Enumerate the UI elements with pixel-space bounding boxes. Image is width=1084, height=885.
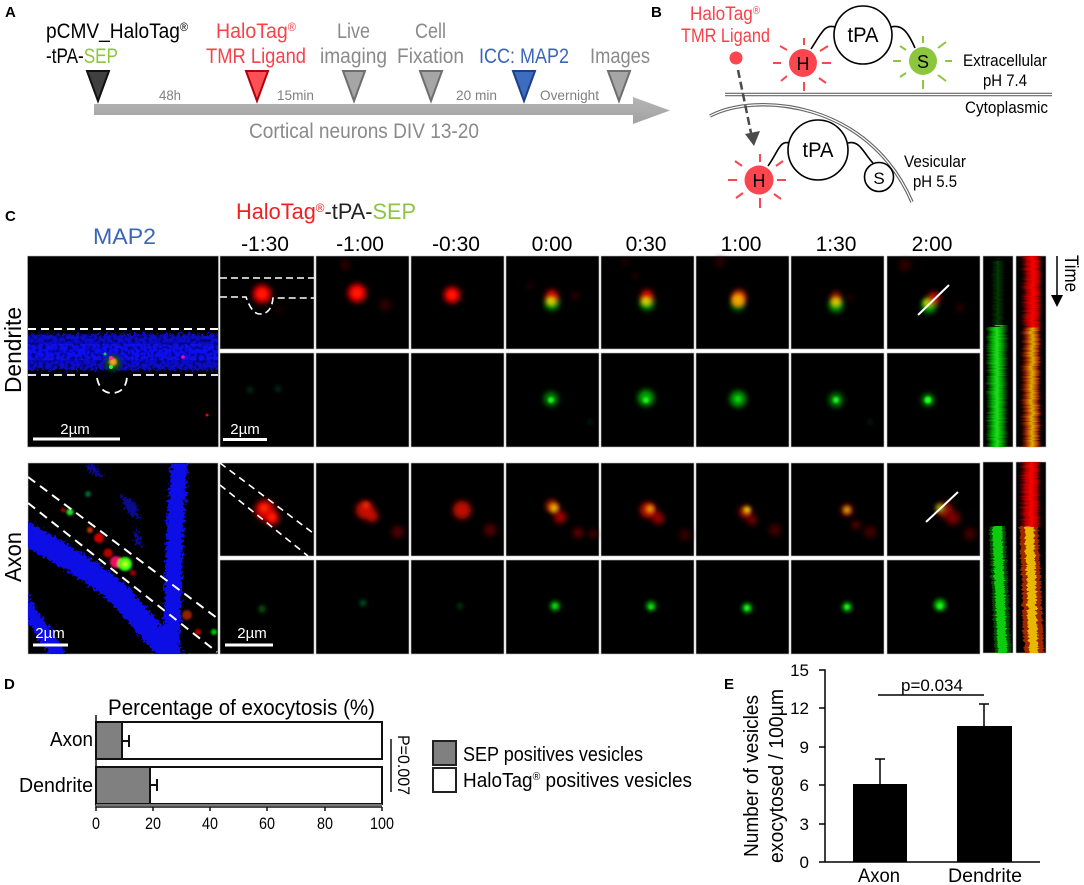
significance [878,676,984,695]
ligand label: ® [753,5,760,17]
time labels: -1:00 [336,233,384,256]
montage title: HaloTag [236,199,317,224]
entry arrow [738,70,760,146]
axon green frames: 2µm [237,625,267,642]
MAP2 title: MAP2 [93,224,156,249]
vesicular construct: tPA [802,139,834,162]
compartment labels: Cytoplasmic [965,98,1048,117]
step label: plasmid: pCMV_HaloTag [46,20,193,43]
step marker: images [608,71,630,101]
panel letter C: C [5,208,16,225]
axon MAP2 image [20,455,217,660]
vesicular construct [728,120,894,208]
step marker: live imaging [343,71,365,101]
step marker: plasmid [87,71,109,101]
step label: plasmid: -tPA-SEP [46,45,118,68]
bar: axon [96,722,382,759]
ligand label: HaloTag [690,4,760,25]
axon kymographs [989,460,1044,655]
interval labels: 48h [159,87,181,103]
dendrite kymographs [986,254,1043,451]
chart title: Percentage of exocytosis (%) [108,695,375,720]
row label: dendrite: Dendrite [0,307,26,393]
axis tick labels: 80 [317,814,333,833]
axon MAP2 image: 2µm [35,625,65,642]
dendrite green frames [230,386,934,438]
dendrite red and merged frames [220,257,964,441]
bar: dendrite [96,767,382,804]
axis tick labels: 0 [800,853,809,872]
step label: ligand: TMR Ligand [206,45,306,68]
step label: live imaging: imaging [320,45,387,68]
ligand label: TMR Ligand [681,26,770,47]
axis tick labels: 12 [790,699,809,718]
time labels: 2:00 [912,233,952,256]
time labels: 0:30 [626,233,666,256]
compartment labels: pH 7.4 [983,71,1027,90]
panel E: vesicles exocytosed chart [724,661,1040,885]
axis tick labels: 60 [259,814,275,833]
time labels: 0:00 [532,233,572,256]
montage title: ® [316,201,325,215]
dendrite MAP2 image [20,328,230,440]
interval labels [159,87,599,103]
row label: axon: Axon [0,532,26,582]
extracellular construct: tPA [848,24,878,47]
timeline caption: Cortical neurons DIV 13-20 [249,120,479,143]
time labels: -1:30 [241,233,289,256]
axis tick labels: 20 [145,814,161,833]
line scan marker, axon [926,492,958,522]
interval labels: 15min [277,87,314,103]
extracellular construct: S [917,52,929,72]
axes [96,715,382,811]
montage title: -tPA- [325,199,372,224]
step label: ligand: HaloTag [216,20,293,43]
panel B: reporter schematic [651,4,1052,208]
panel letter B: B [651,4,662,21]
axis tick labels: 40 [202,814,218,833]
panel letter E: E [724,676,734,693]
vesicle membrane [710,105,912,202]
dashed axon outline, first frame [220,463,313,556]
panel D: percentage of exocytosis chart [4,676,692,833]
axis tick labels: 15 [790,661,809,680]
time labels: -0:30 [432,233,480,256]
compartment labels: pH 5.5 [913,172,957,191]
step label: live imaging: Live [337,20,370,43]
category labels: Axon [50,729,93,751]
legend: ® [533,771,540,783]
y axis title: Number of vesicles [741,695,763,857]
axes [819,670,1040,862]
axon green frames [225,599,946,646]
vesicular construct: S [873,169,885,188]
legend: SEP positives vesicles [463,744,643,766]
step label: ligand [206,20,306,68]
axis tick labels: 100 [370,814,394,833]
step label: images: Images [590,45,650,68]
plasma membrane [725,93,1052,96]
step marker: cell fixation [420,71,442,101]
axis tick labels: 3 [800,815,809,834]
panel letter D: D [4,676,15,693]
significance: p=0.034 [901,676,963,695]
image frames [28,256,1046,654]
step label: plasmid [46,20,188,68]
dendrite green frames: 2µm [230,421,260,438]
axis tick labels: 6 [800,776,809,795]
legend: positives vesicles [540,770,692,792]
interval labels: 20 min [456,87,497,103]
category labels: Dendrite [19,775,93,797]
axis tick labels [790,661,809,872]
ligand dot [730,52,742,64]
significance: P=0.007 [394,735,413,795]
panel A: experimental timeline [5,4,670,143]
axis tick labels [92,814,394,833]
vesicular construct: H [752,171,766,191]
panel C: live imaging montage [0,199,1081,660]
axis tick labels: 9 [800,738,809,757]
step marker: ligand [246,71,268,101]
montage title: SEP [372,199,416,224]
axis tick labels: 0 [92,814,100,833]
step label: plasmid: ® [180,20,188,34]
bar: axon [853,759,907,862]
dendrite MAP2 image: 2µm [60,421,90,438]
compartment labels: Vesicular [904,152,966,171]
step label: live imaging [320,20,387,68]
step label: ligand: ® [288,20,296,34]
step label: cell fixation [397,20,464,68]
dashed cell outline, first frame [220,278,314,314]
category labels [858,866,1022,885]
time arrow [1051,255,1081,307]
extracellular construct: H [796,54,810,74]
time labels: 1:00 [721,233,761,256]
compartment labels [904,51,1048,191]
line scan marker, dendrite [918,285,949,315]
interval labels: Overnight [540,87,599,103]
category labels [19,729,93,797]
bar: dendrite [957,704,1012,862]
ligand label [681,4,770,47]
legend: HaloTag [463,770,536,792]
panel letter A: A [5,4,16,21]
step marker: ICC MAP2 [513,71,535,101]
time arrow: Time [1060,255,1081,292]
timeline arrow [94,97,670,124]
extracellular construct [773,6,952,91]
step label: cell fixation: Fixation [397,45,464,68]
time labels: 1:30 [816,233,856,256]
compartment labels: Extracellular [963,51,1047,70]
step label: ICC MAP2: ICC: MAP2 [479,45,569,68]
time labels [241,233,952,256]
y axis title [741,689,788,863]
axon red and merged frames [220,463,976,556]
legend [433,741,692,792]
y axis title: exocytosed / 100µm [766,689,788,863]
step label: cell fixation: Cell [415,20,446,43]
